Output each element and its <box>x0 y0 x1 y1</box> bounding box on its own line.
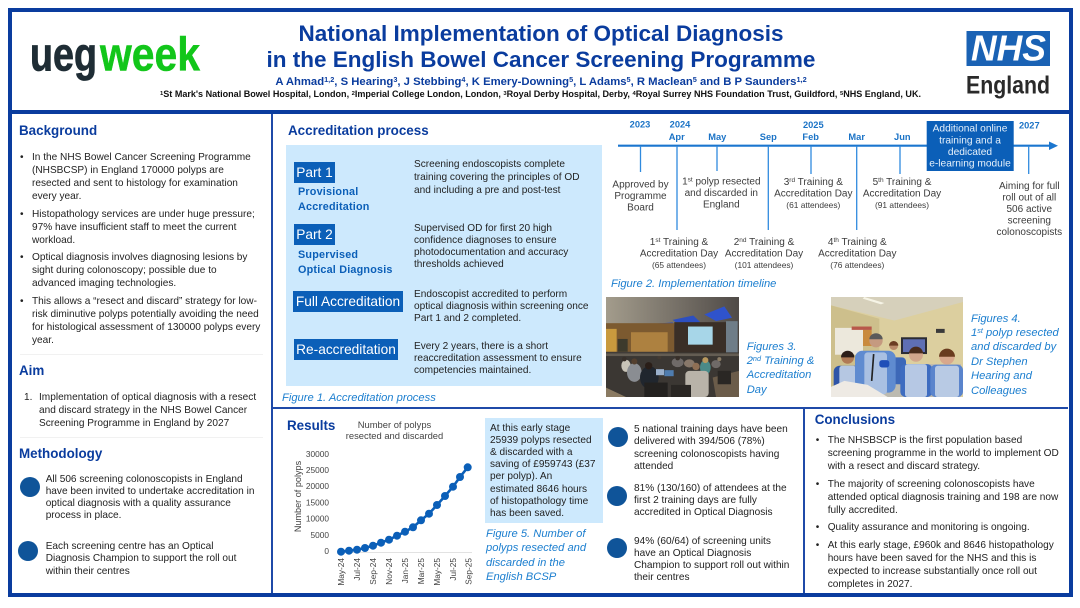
bullet: optical diagnosis: Optical diagnosis involves diagnosing lesions by <box>32 252 247 263</box>
timeline label: approved: Board <box>627 202 654 214</box>
x axis ticks: Sep-25 <box>464 558 474 585</box>
tag: full accreditation: Full Accreditation <box>296 294 400 309</box>
bullet: polyps per year <box>20 152 251 202</box>
methodology text 1: All 506 screening colonoscopists in England <box>46 474 243 484</box>
caption: figure 5: English BCSP <box>486 571 556 583</box>
timeline label: fourth training day: 4 <box>828 237 833 248</box>
bullet: optical diagnosis <box>20 252 248 289</box>
conclusion: first population programme <box>816 435 1059 472</box>
callout: online training: training and a <box>939 135 1001 146</box>
timeline label: third training day: (61 attendees) <box>786 200 841 210</box>
caption: figure 1: Figure 1. Accreditation process <box>282 392 436 404</box>
bullet: histopathology pressure: workload. <box>32 235 75 246</box>
timeline label: first training day <box>640 237 718 270</box>
panel: conclusions: • <box>816 522 819 533</box>
timeline label: second training day: (101 attendees) <box>735 260 794 270</box>
callout: savings <box>485 418 603 522</box>
chart title: Number of polyps <box>358 419 432 430</box>
caption: figure 5: polyps resected and <box>486 542 586 554</box>
timeline label: first polyp: England <box>703 200 740 210</box>
caption: figure 5: Figure 5. Number of <box>486 528 586 540</box>
timeline label: fifth training day: (91 attendees) <box>875 200 929 210</box>
timeline label: second training day: 2 <box>734 237 739 248</box>
caption: figures 4: 1st polyp resected <box>971 326 1059 339</box>
caption: figures 4: Dr Stephen <box>971 356 1028 368</box>
timeline label: first training day: (65 attendees) <box>652 260 706 270</box>
y axis ticks: 20000 <box>306 481 329 491</box>
methodology text 1 <box>46 474 254 520</box>
title <box>267 20 815 72</box>
text: full accreditation <box>414 288 589 324</box>
timeline label: first training day: Accreditation Day <box>640 248 718 260</box>
result: accredited: 81% (130/160) of attendees at the <box>634 483 787 494</box>
text: re-accreditation <box>414 340 582 376</box>
timeline label: first polyp: 1 <box>682 176 688 188</box>
conclusion: first population programme: screening programme in the world to implement OD <box>828 448 1059 459</box>
timeline label: fourth training day: Accreditation Day <box>818 248 896 260</box>
text: part 2 <box>414 223 568 270</box>
callout: savings: estimated 8646 hours <box>490 484 587 494</box>
chart title <box>346 419 443 441</box>
caption: figures 3: Accreditation <box>747 369 811 381</box>
timeline label: first training day: Training & <box>660 237 709 248</box>
timeline dates: 2025 <box>803 120 824 130</box>
bullet: resect and discard <box>20 296 260 346</box>
timeline label: third training day: rd <box>789 177 795 184</box>
panel: background: • <box>20 209 24 220</box>
caption: figures 4: Hearing and <box>971 370 1032 382</box>
panel: accreditation process <box>286 145 602 386</box>
bullet: histopathology pressure: 97% have insufficient staff to meet the current <box>32 222 236 233</box>
text: part 2: confidence diagnoses to ensure <box>414 235 557 246</box>
conclusion: attendance: fully accredited. <box>828 504 898 516</box>
conclusion: first population programme: with a resect and discard strategy. <box>828 461 980 472</box>
timeline label: first polyp: and discarded in <box>685 188 758 199</box>
conclusion: attendance: attended optical diagnosis training and 198 are now <box>828 492 1058 502</box>
bullet: polyps per year: resected and sent to histology for examination <box>32 178 238 188</box>
authors: A Ahmad1,2, S Hearing3, J Stebbing4, K Emery-Downing5, L Adams5, R Maclean5 and B P Saunders1,2 <box>275 75 807 88</box>
text: full accreditation: optical diagnosis within screening once <box>414 300 589 312</box>
affiliations: 1St Mark's National Bowel Hospital, London, 2Imperial College London, London, 3Royal Derby Hospital, Derby, 4Royal Surrey NHS Foundation Trust, Guildford, 5NHS England, UK. <box>160 89 921 99</box>
timeline label: third training day: Training & <box>795 177 843 188</box>
result: training days: delivered with 394/506 (78%) <box>634 436 765 446</box>
conclusion: savings: At this early stage, £960k and 8646 histopathology <box>828 540 1054 550</box>
conclusion: savings <box>816 540 1054 590</box>
conclusion: attendance <box>816 478 1058 516</box>
timeline dates <box>630 120 1040 142</box>
panel: conclusions: • <box>816 435 819 446</box>
bullet: optical diagnosis: advanced imaging technologies. <box>32 278 176 289</box>
timeline label: fifth training day: th <box>878 177 884 184</box>
timeline dates: 2027 <box>1019 120 1040 130</box>
callout: savings: of histopathology time <box>490 496 588 506</box>
x axis ticks: Jul-25 <box>448 558 458 581</box>
caption: figures 4 <box>971 312 1059 397</box>
timeline label: full roll out: Aiming for full <box>999 181 1060 192</box>
bullet: histopathology pressure <box>20 209 255 246</box>
caption: figures 3 <box>746 340 814 396</box>
methodology text 2 <box>46 540 236 576</box>
result: champions: have an Optical Diagnosis <box>634 548 751 558</box>
bullet: polyps per year: every year. <box>32 190 81 202</box>
label: supervised optical diagnosis <box>298 248 393 276</box>
icon: circle accredited <box>607 486 627 506</box>
callout: online training: Additional online <box>933 124 1008 135</box>
x axis ticks <box>336 558 474 586</box>
aim list item: Implementation of optical diagnosis with a resect <box>39 392 256 403</box>
icon: circle training days <box>608 427 628 447</box>
x axis ticks: May-24 <box>336 558 346 586</box>
panel border: conclusions left <box>803 408 805 593</box>
callout: online training: dedicated <box>948 147 992 158</box>
result: accredited: first 2 training days are fully <box>634 495 757 506</box>
logo: ueg week <box>30 28 201 81</box>
label: provisional accreditation: Accreditation <box>298 200 370 212</box>
result: champions: their centres <box>634 572 690 582</box>
heading: methodology: Methodology <box>19 446 102 461</box>
panel: conclusions <box>815 412 1059 590</box>
people <box>834 333 963 397</box>
methodology text 1: optical diagnosis with a quality assurance <box>46 498 231 508</box>
icon: circle champions <box>607 538 627 558</box>
timeline label: second training day: Accreditation Day <box>725 248 803 260</box>
text: part 1 <box>414 159 580 196</box>
caption: figures 4: Colleagues <box>971 385 1027 397</box>
timeline label: first training day: 1 <box>650 237 655 248</box>
timeline label: first training day: st <box>655 237 661 244</box>
timeline dates: Mar <box>848 132 865 142</box>
aim list item: and discard strategy in the NHS Bowel Cancer <box>39 405 247 416</box>
text: part 1: and including a pre and post-test <box>414 185 560 196</box>
methodology text 2: Each screening centre has an Optical <box>46 540 213 552</box>
tag: full accreditation <box>293 291 403 312</box>
heading: conclusions: Conclusions <box>815 412 895 427</box>
timeline label: second training day <box>725 237 803 270</box>
timeline label: approved: Approved by <box>612 180 669 190</box>
text: part 2: photodocumentation and accuracy <box>414 247 568 258</box>
panel: methodology <box>18 446 254 576</box>
timeline label: full roll out: 506 active <box>1007 204 1053 215</box>
icon: circle 1 <box>20 477 40 497</box>
conclusion: quality assurance: Quality assurance and monitoring is ongoing. <box>828 522 1030 533</box>
callout: savings: has been saved. <box>490 508 564 518</box>
label: supervised optical diagnosis: Supervised <box>298 248 358 260</box>
caption: figure 2: Figure 2. Implementation timeline <box>611 278 776 290</box>
label: supervised optical diagnosis: Optical Diagnosis <box>298 264 393 276</box>
callout: online training <box>927 121 1014 171</box>
x axis ticks: Sep-24 <box>368 558 378 585</box>
timeline label: first polyp: polyp resected <box>693 176 761 188</box>
tag: part 1 <box>294 162 335 183</box>
text: re-accreditation: reaccreditation assessment to ensure <box>414 352 582 364</box>
aim list item <box>24 392 256 429</box>
text: full accreditation: Part 1 and 2 completed. <box>414 312 521 324</box>
timeline dates: 2023 <box>630 120 650 130</box>
data series <box>337 463 472 556</box>
heading: accreditation process: Accreditation process <box>288 122 429 138</box>
bullet: resect and discard: for histological assessment of 130000 polyps every <box>32 322 260 333</box>
text: part 1: Screening endoscopists complete <box>414 159 565 170</box>
timeline label: first polyp <box>682 176 761 210</box>
bullet: polyps per year: (NHSBCSP) in England 170000 polyps are <box>32 164 224 176</box>
panel: conclusions: • <box>816 478 819 490</box>
caption: figure 5 <box>486 528 586 583</box>
timeline label: fourth training day <box>818 237 896 270</box>
logo: NHS England <box>966 28 1050 100</box>
panel: background: • <box>20 152 24 162</box>
panel border: left column <box>271 114 273 593</box>
bullet: resect and discard: This allows a “resect and discard” strategy for low- <box>32 296 257 307</box>
callout: savings: saving of £959743 (£37 <box>490 458 596 470</box>
timeline dates: Feb <box>802 132 819 142</box>
timeline label: fourth training day: th <box>833 237 839 244</box>
timeline dates: May <box>708 132 727 142</box>
heading: background: Background <box>19 123 97 138</box>
timeline label: second training day: nd <box>739 237 747 244</box>
y axis ticks: 25000 <box>306 465 329 475</box>
callout: savings: 25939 polyps resected <box>490 434 592 446</box>
callout: savings: & discarded with a <box>490 446 572 458</box>
timeline label: second training day: Training & <box>746 237 795 248</box>
timeline label: fourth training day: Training & <box>839 237 887 248</box>
text: full accreditation: Endoscopist accredited to perform <box>414 288 567 300</box>
logo: NHS England: NHS <box>971 28 1046 68</box>
tag: re-accreditation <box>294 339 398 360</box>
timeline label: full roll out: colonoscopists <box>997 227 1062 238</box>
methodology text 2: within their centres <box>46 566 130 576</box>
timeline dates: Jun <box>894 132 911 142</box>
caption: figures 3: 2nd Training & <box>747 354 814 367</box>
caption: figures 4: Figures 4. <box>971 312 1021 324</box>
callout: savings: At this early stage <box>490 422 570 434</box>
conclusion: first population programme: The NHSBSCP is the first population based <box>828 435 1022 446</box>
text: re-accreditation: Every 2 years, there is a short <box>414 340 548 352</box>
heading: aim: Aim <box>19 362 44 378</box>
timeline label: fifth training day: Accreditation Day <box>863 188 941 200</box>
x axis ticks: Nov-24 <box>384 558 394 585</box>
panel: aim: 1. <box>24 392 32 403</box>
y axis ticks: 0 <box>324 546 329 556</box>
tag: part 1: Part 1 <box>296 165 333 180</box>
y axis ticks: 10000 <box>306 514 329 524</box>
y axis ticks: 15000 <box>306 498 329 508</box>
timeline dates: Apr <box>669 132 685 142</box>
conclusion: savings: hours have been saved for the NHS and this is <box>828 552 1036 564</box>
bullet: polyps per year: In the NHS Bowel Cancer Screening Programme <box>32 152 251 162</box>
timeline label: full roll out: screening <box>1008 216 1051 226</box>
bullet: resect and discard: risk diminutive polyps potentially avoiding the need <box>32 309 259 320</box>
chart title: resected and discarded <box>346 430 443 441</box>
timeline label: third training day <box>774 177 852 210</box>
title: National Implementation of Optical Diagnosis <box>298 20 784 46</box>
text: part 2: Supervised OD for first 20 high <box>414 223 552 234</box>
timeline label: fourth training day: (76 attendees) <box>830 260 885 270</box>
caption: figures 3: Figures 3. <box>747 340 796 352</box>
result: champions: Champion to support roll out within <box>634 560 789 570</box>
result: accredited <box>634 483 787 518</box>
heading: results: Results <box>287 418 335 432</box>
timeline label: first polyp: st <box>688 176 693 184</box>
timeline label: fifth training day: Training & <box>884 177 932 188</box>
tag: re-accreditation: Re-accreditation <box>296 342 396 357</box>
text: part 1: training covering the principles of OD <box>414 172 580 183</box>
x axis ticks: Jul-24 <box>352 558 362 581</box>
timeline label: full roll out <box>997 181 1062 238</box>
text: re-accreditation: competencies maintained. <box>414 364 531 376</box>
label: provisional accreditation: Provisional <box>298 186 358 198</box>
tag: part 2: Part 2 <box>296 227 333 242</box>
text: part 2: thresholds achieved <box>414 259 504 270</box>
timeline <box>612 120 1062 270</box>
x axis ticks: May-25 <box>432 558 442 586</box>
timeline label: fifth training day <box>863 177 941 210</box>
bullet: resect and discard: year. <box>32 335 54 346</box>
x axis ticks: Jan-25 <box>400 558 410 583</box>
panel: aim <box>19 362 256 429</box>
header divider <box>8 110 1073 114</box>
result: champions: 94% (60/64) of screening units <box>634 536 771 546</box>
timeline dates: Sep <box>760 132 777 142</box>
bullet: histopathology pressure: Histopathology services are under huge pressure; <box>32 209 255 220</box>
result: training days <box>634 424 788 472</box>
y axis ticks: 30000 <box>306 449 329 459</box>
panel: background: • <box>20 296 24 307</box>
photo: training day audience <box>606 297 739 397</box>
conclusion: savings: expected to increase substantially once roll out <box>828 566 1037 576</box>
caption: figures 4: and discarded by <box>971 341 1056 353</box>
y axis ticks <box>306 449 329 556</box>
timeline label: third training day: 3 <box>784 177 789 188</box>
result: training days: 5 national training days have been <box>634 424 788 434</box>
conclusion: savings: completes in 2027. <box>828 578 912 590</box>
panel: background: • <box>20 252 24 263</box>
methodology text 1: have been invited to undertake accreditation in <box>46 486 254 496</box>
callout: savings: per polyp). An <box>490 470 552 482</box>
label: provisional accreditation <box>298 186 370 212</box>
result: training days: screening colonoscopists having <box>634 448 779 460</box>
timeline dates: 2024 <box>670 120 691 130</box>
timeline label: full roll out: roll out of all <box>1002 192 1056 204</box>
result: accredited: accredited in Optical Diagnosis <box>634 507 773 518</box>
tag: part 2 <box>294 224 335 245</box>
y axis ticks: 5000 <box>311 530 329 540</box>
caption: figure 5: discarded in the <box>486 557 565 569</box>
title: in the English Bowel Cancer Screening Programme <box>267 46 815 72</box>
timeline label: approved: Programme <box>614 191 667 202</box>
result: champions <box>634 536 789 582</box>
timeline label: approved <box>612 180 669 214</box>
bullet: optical diagnosis: sight during colonoscopy; possible due to <box>32 265 217 276</box>
caption: figures 3: Day <box>747 384 767 396</box>
result: training days: attended <box>634 460 673 472</box>
methodology text 2: Diagnosis Champion to support the roll out <box>46 552 236 564</box>
timeline label: fifth training day: 5 <box>873 177 878 188</box>
logo: ueg week: ueg <box>30 28 97 80</box>
x axis ticks: Mar-25 <box>416 558 426 584</box>
panel: conclusions: • <box>816 540 819 550</box>
panel border: results top <box>271 407 1068 409</box>
aim list item: Screening Programme in England by 2027 <box>39 418 229 429</box>
conclusion: attendance: The majority of screening colonoscopists have <box>828 478 1035 490</box>
panel: background <box>19 123 260 346</box>
photo: colleagues in endoscopy room <box>831 297 963 397</box>
line chart: polyps resected and discarded <box>293 419 474 586</box>
timeline label: third training day: Accreditation Day <box>774 188 852 200</box>
y axis label: Number of polyps <box>293 460 303 532</box>
methodology text 1: process in place. <box>46 510 121 520</box>
icon: circle 2 <box>18 541 38 561</box>
callout: online training: e-learning module <box>929 159 1011 170</box>
